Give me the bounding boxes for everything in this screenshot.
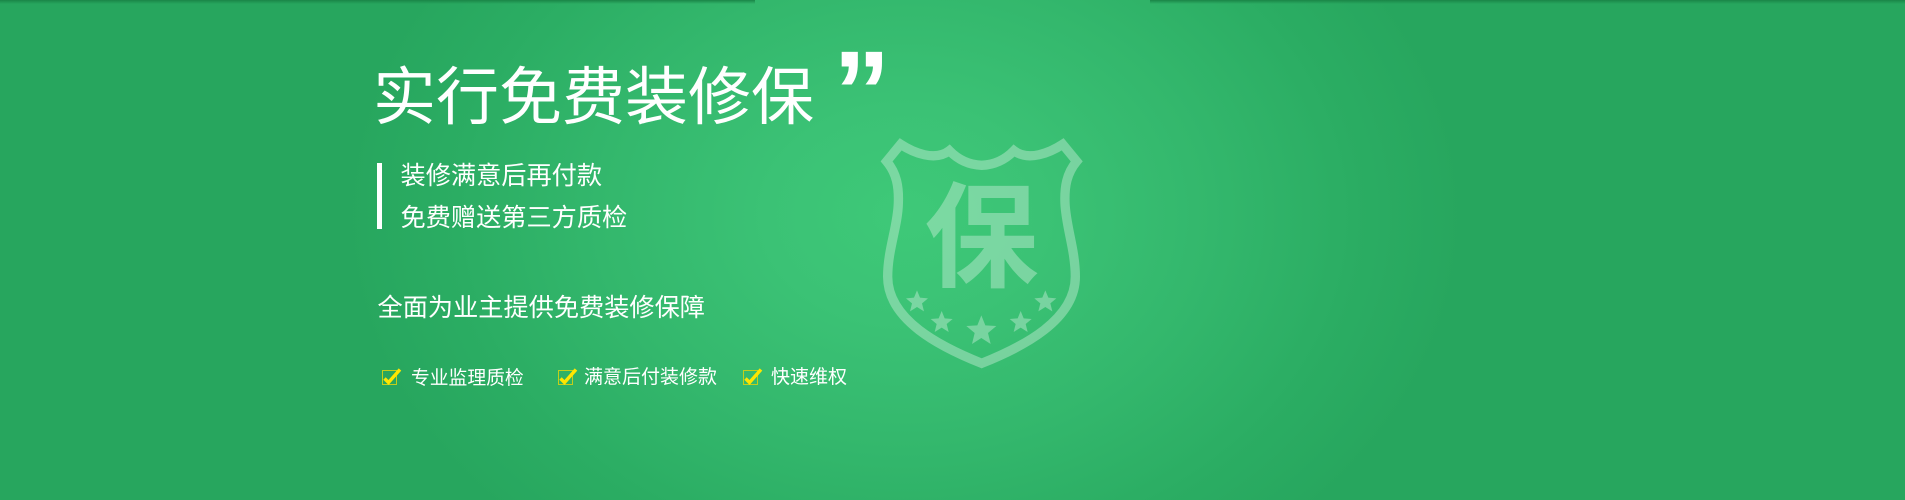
top edge shadow left: [0, 0, 755, 4]
guarantee statement: 全面为业主提供免费装修保障: [378, 294, 705, 322]
vertical accent bar: [377, 163, 382, 229]
check label 2: 满意后付装修款: [584, 367, 717, 388]
top edge shadow right: [1150, 0, 1905, 4]
icon: check 1: [382, 368, 402, 385]
subtitle line 1: 装修满意后再付款: [400, 162, 602, 190]
check label 1: 专业监理质检: [411, 367, 524, 388]
check label 3: 快速维权: [771, 367, 847, 388]
icon: check 3: [743, 368, 762, 385]
closing quote mark: ”: [833, 28, 890, 156]
subtitle line 2: 免费赠送第三方质检: [400, 204, 627, 232]
icon: check 2: [558, 368, 578, 385]
icon: shield watermark: 保: [924, 146, 1038, 311]
icon: shield watermark: [880, 138, 1083, 368]
title: 实行免费装修保: [373, 63, 814, 133]
